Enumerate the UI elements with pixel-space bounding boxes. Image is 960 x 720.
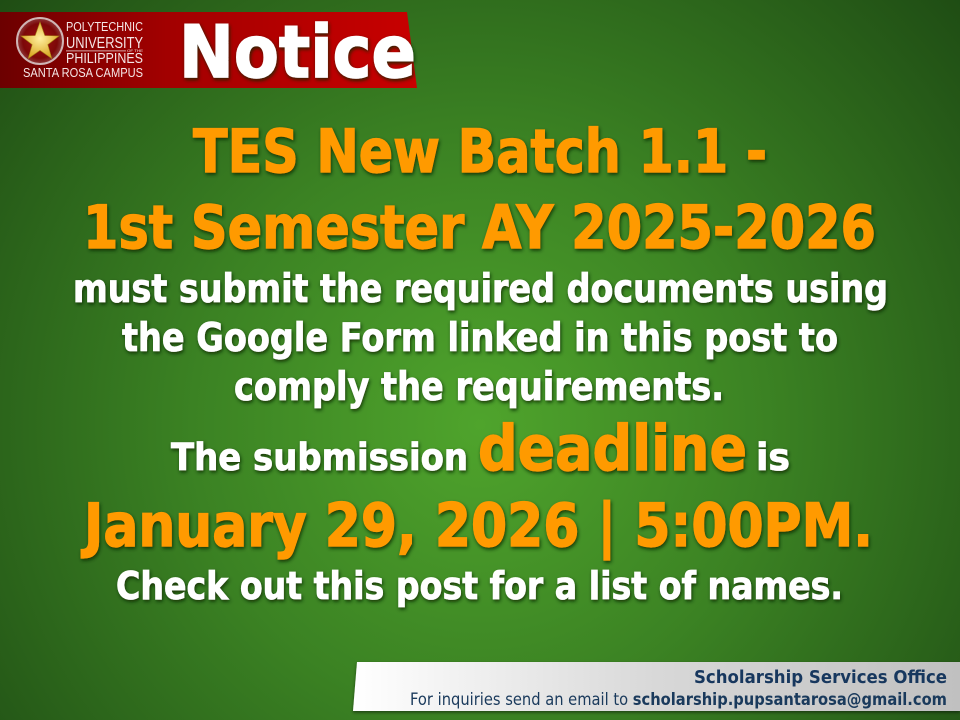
footer panel	[353, 662, 960, 711]
names note: Check out this post for a list of names.	[116, 564, 843, 608]
instructions text	[73, 267, 888, 410]
university name: PHILIPPINES	[66, 51, 143, 67]
heading: TES batch	[83, 117, 876, 263]
university name: OF THE	[127, 49, 144, 53]
deadline line: deadline	[478, 412, 747, 485]
university name: SANTA ROSA CAMPUS	[23, 66, 143, 80]
footer bar	[353, 662, 960, 711]
Notice heading: Notice	[179, 10, 416, 94]
heading: TES batch: TES New Batch 1.1 -	[193, 117, 767, 187]
university name	[23, 20, 144, 80]
red band	[0, 12, 417, 88]
university seal	[17, 18, 63, 64]
university name: POLYTECHNIC	[66, 20, 143, 34]
instructions text: the Google Form linked in this post to	[122, 316, 838, 361]
instructions text: comply the requirements.	[234, 365, 724, 410]
deadline line	[171, 412, 790, 485]
header banner	[0, 10, 417, 94]
university name: UNIVERSITY	[66, 35, 143, 52]
deadline line: The submission	[171, 436, 468, 479]
deadline line: is	[756, 436, 790, 479]
